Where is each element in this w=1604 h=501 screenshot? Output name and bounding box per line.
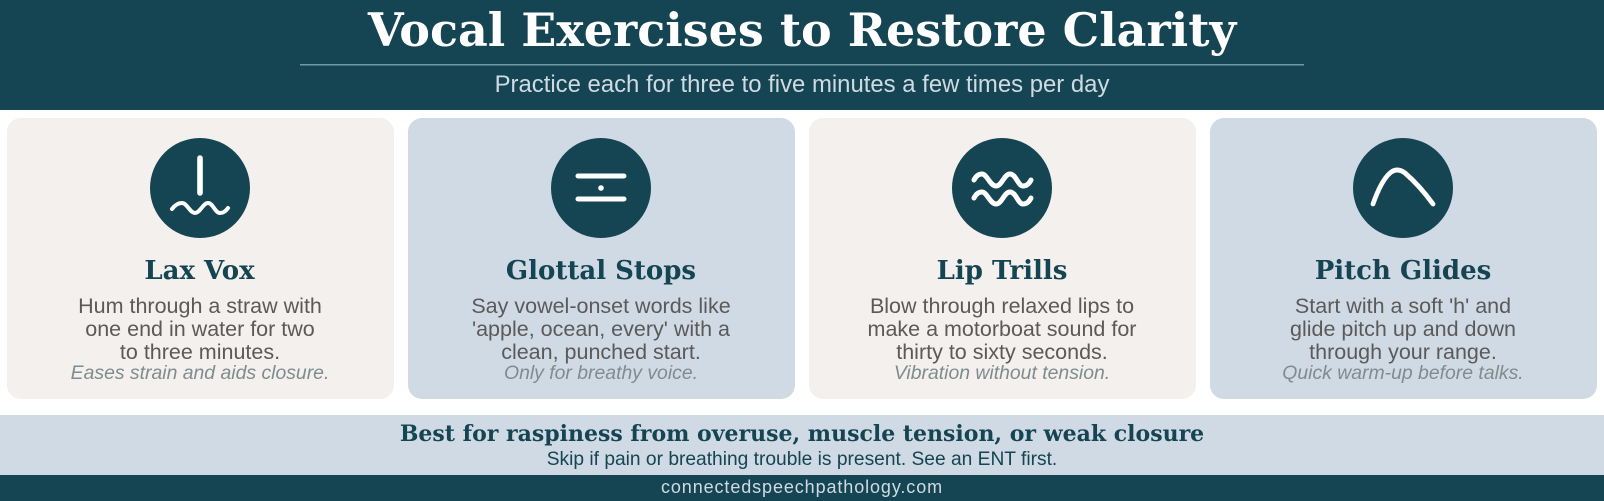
heading: Lip Trills <box>937 256 1067 286</box>
description: to three minutes. <box>120 340 280 364</box>
icon: pitch arc <box>1353 138 1453 238</box>
description: one end in water for two <box>85 317 315 341</box>
footer url: connectedspeechpathology.com <box>661 477 943 497</box>
subtitle: Practice each for three to five minutes a few times per day <box>495 71 1109 98</box>
description: Start with a soft 'h' and <box>1295 294 1511 318</box>
header band <box>0 0 1604 110</box>
description: clean, punched start. <box>501 340 701 364</box>
note: Vibration without tension. <box>894 362 1110 384</box>
footer <box>0 475 1604 501</box>
icon: straw in water <box>150 138 250 238</box>
panel: Lip Trills <box>809 118 1196 399</box>
description: through your range. <box>1309 340 1497 364</box>
note: Quick warm-up before talks. <box>1282 362 1524 384</box>
panel: Pitch Glides <box>1210 118 1597 399</box>
callout heading: Best for raspiness from overuse, muscle tension, or weak closure <box>400 421 1204 447</box>
description: Say vowel-onset words like <box>471 294 731 318</box>
callout band <box>0 415 1604 475</box>
description: glide pitch up and down <box>1290 317 1516 341</box>
callout text: Skip if pain or breathing trouble is present. See an ENT first. <box>547 449 1057 470</box>
icon: stop lines <box>551 138 651 238</box>
icon: double wave <box>952 138 1052 238</box>
description: Blow through relaxed lips to <box>870 294 1134 318</box>
note: Eases strain and aids closure. <box>71 362 329 384</box>
heading: Glottal Stops <box>506 256 696 286</box>
panel: Lax Vox <box>7 118 394 399</box>
heading: Lax Vox <box>144 256 255 286</box>
note: Only for breathy voice. <box>504 362 698 384</box>
description: thirty to sixty seconds. <box>896 340 1108 364</box>
heading: Pitch Glides <box>1315 256 1491 286</box>
description: Hum through a straw with <box>78 294 322 318</box>
panel: Glottal Stops <box>408 118 795 399</box>
description: 'apple, ocean, every' with a <box>472 317 730 341</box>
description: make a motorboat sound for <box>868 317 1136 341</box>
title: Vocal Exercises to Restore Clarity <box>367 3 1237 57</box>
